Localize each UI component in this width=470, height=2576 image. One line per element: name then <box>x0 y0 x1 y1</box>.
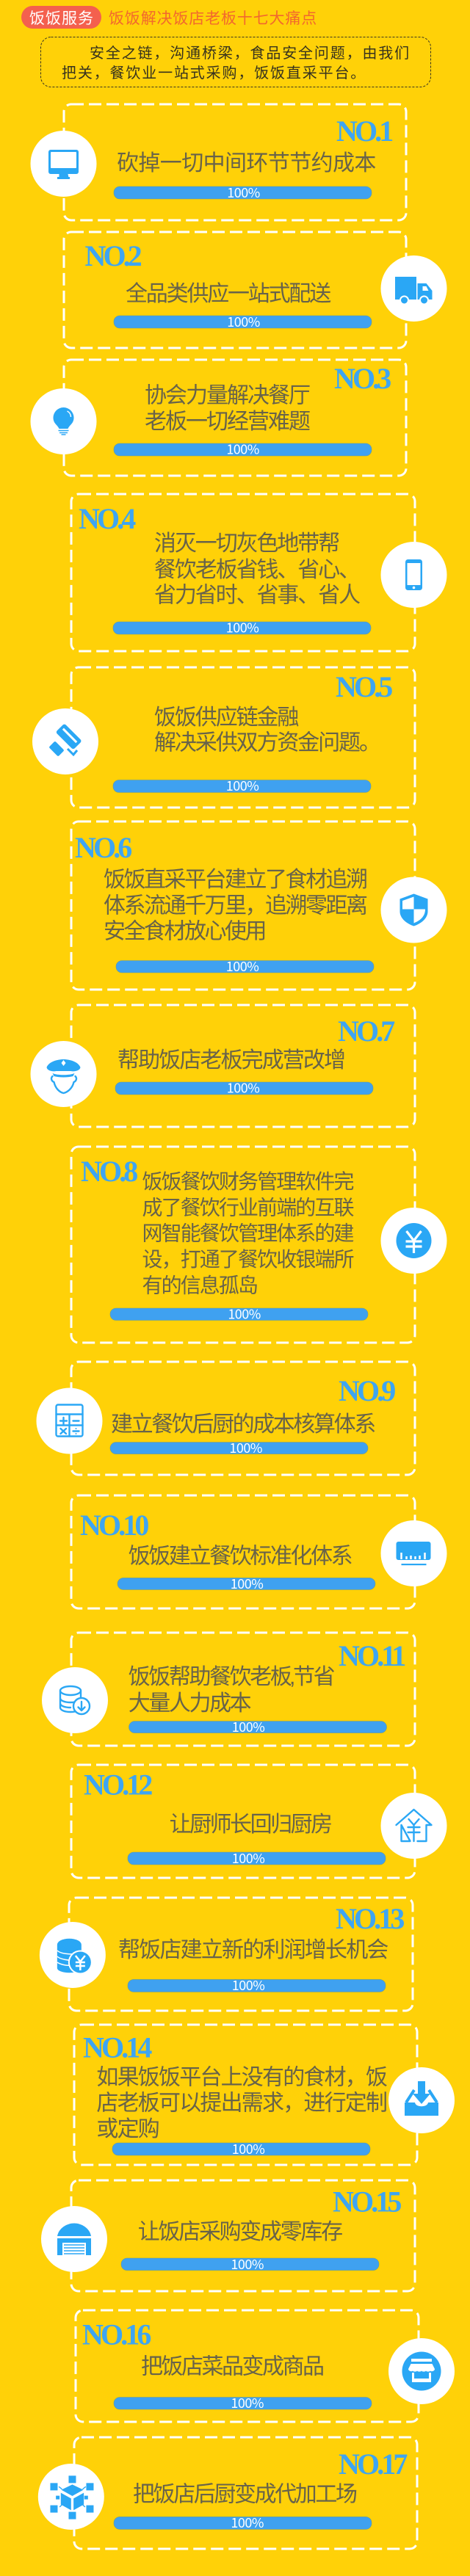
panel: NO.11 <box>42 1633 415 1746</box>
icon: officer <box>31 1041 97 1107</box>
panel: NO.3 <box>31 360 406 476</box>
description: 饭饭帮助餐饮老板 <box>129 1665 292 1689</box>
description: 老板一切经营难题 <box>145 410 310 434</box>
progress bar: 100% <box>231 2393 264 2412</box>
panel: NO.8 <box>71 1147 446 1343</box>
number: NO.16 <box>82 2318 151 2351</box>
description: 如果饭饭平台上没有的食材，饭 <box>96 2066 387 2090</box>
icon: network cube <box>38 2464 104 2530</box>
panel: NO.16 <box>76 2310 455 2422</box>
section tag pill: 饭饭服务 <box>29 10 94 27</box>
icon: garage <box>41 2206 107 2272</box>
panel: NO.10 <box>71 1495 446 1608</box>
description: 设，打通了餐饮收银端所 <box>142 1248 354 1271</box>
description: 建立餐饮后厨的成本核算体系 <box>111 1412 375 1437</box>
number: NO.12 <box>84 1768 152 1802</box>
description: 把饭店菜品变成商品 <box>141 2355 323 2379</box>
description: 成了餐饮行业前端的互联 <box>142 1197 355 1219</box>
number: NO.10 <box>80 1509 148 1542</box>
panel: NO.13 <box>40 1898 413 2011</box>
number: NO.13 <box>336 1902 404 1935</box>
progress bar <box>112 2139 370 2158</box>
panel: NO.1 <box>31 104 406 220</box>
progress bar <box>114 183 372 202</box>
description: 帮助饭店老板完成营改增 <box>118 1048 344 1073</box>
description: 砍掉一切中间环节节约成本 <box>117 151 376 175</box>
description: 安全食材放心使用 <box>104 919 265 943</box>
icon: yen coin <box>380 1208 446 1274</box>
progress bar: 100% <box>228 1304 261 1323</box>
progress bar: 100% <box>227 1078 259 1097</box>
progress bar <box>113 618 371 637</box>
intro text box: 安全之链，沟通桥梁，食品安全问题，由我们 <box>90 45 411 62</box>
panel: NO.15 <box>41 2180 415 2291</box>
icon: shop <box>388 2338 455 2404</box>
description: 饭饭建立餐饮标准化体系 <box>129 1544 352 1568</box>
description: 解决采供双方资金问题。 <box>154 731 380 755</box>
progress bar: 100% <box>232 2139 264 2158</box>
panel: NO.7 <box>31 1005 415 1127</box>
icon: light bulb <box>31 388 97 454</box>
progress bar: 100% <box>226 439 259 458</box>
icon: database download <box>42 1667 108 1733</box>
progress bar: 100% <box>231 1574 263 1593</box>
description: 饭饭直采平台建立了食材追溯 <box>104 868 366 892</box>
progress bar: 100% <box>226 957 258 976</box>
icon: paint roller <box>32 708 98 774</box>
progress bar <box>128 1848 386 1868</box>
description: 协会力量解决餐厅 <box>145 383 310 408</box>
number: NO.6 <box>75 831 131 864</box>
number: NO.15 <box>333 2185 401 2218</box>
description: 让饭店采购变成零库存 <box>138 2220 342 2244</box>
icon: air conditioner <box>380 1520 446 1586</box>
number: NO.5 <box>336 670 392 703</box>
number: NO.9 <box>339 1374 395 1407</box>
panel: NO.12 <box>71 1765 446 1878</box>
icon: shield <box>380 877 446 943</box>
progress bar: 100% <box>231 2254 264 2274</box>
icon: monitor <box>31 131 97 197</box>
progress bar <box>110 1304 368 1323</box>
progress bar <box>118 1574 375 1593</box>
description: 有的信息孤岛 <box>142 1274 257 1296</box>
number: NO.17 <box>339 2448 408 2481</box>
intro text box: 把关，餐饮业一站式采购，饭饭直采平台。 <box>62 65 366 81</box>
progress bar <box>114 2513 372 2532</box>
description: 节省 <box>293 1665 335 1689</box>
progress bar <box>128 1975 386 1995</box>
section tag pill <box>21 6 101 29</box>
icon: truck <box>380 255 446 322</box>
description: 消灭一切灰色地带帮 <box>154 531 339 556</box>
description: 店老板可以提出需求，进行定制 <box>96 2091 386 2116</box>
icon: phone <box>380 542 446 608</box>
progress bar <box>114 2393 372 2412</box>
description: , <box>289 1665 294 1689</box>
progress bar: 100% <box>232 1975 264 1995</box>
progress bar: 100% <box>229 1438 262 1457</box>
number: NO.14 <box>83 2031 152 2064</box>
number: NO.4 <box>79 502 136 535</box>
panel: NO.14 <box>74 2025 455 2165</box>
description: 大量人力成本 <box>129 1691 251 1716</box>
progress bar: 100% <box>226 776 258 795</box>
number: NO.8 <box>81 1155 137 1188</box>
progress bar: 100% <box>232 1848 264 1868</box>
description: 饭饭餐饮财务管理软件完 <box>142 1170 354 1193</box>
number: NO.1 <box>336 115 392 148</box>
icon: calculator <box>37 1387 103 1454</box>
panel: NO.5 <box>32 667 415 808</box>
progress bar <box>115 1078 373 1097</box>
number: NO.11 <box>339 1639 405 1672</box>
description: 饭饭供应链金融 <box>154 705 298 730</box>
description: 或定购 <box>96 2117 159 2141</box>
progress bar <box>116 957 374 976</box>
icon: coins <box>40 1922 106 1988</box>
description: 把饭店后厨变成代加工场 <box>133 2483 357 2507</box>
panel: NO.4 <box>71 494 446 651</box>
description: 网智能餐饮管理体系的建 <box>142 1222 354 1245</box>
panel: NO.17 <box>38 2437 417 2549</box>
progress bar <box>114 312 372 331</box>
panel: NO.9 <box>37 1362 415 1475</box>
number: NO.7 <box>338 1015 395 1048</box>
progress bar <box>113 776 371 795</box>
progress bar <box>129 1717 386 1736</box>
description: 帮饭店建立新的利润增长机会 <box>118 1938 388 1962</box>
progress bar <box>121 2254 379 2274</box>
description: 省力省时、省事、省人 <box>154 583 360 608</box>
progress bar: 100% <box>226 618 258 637</box>
description: 全品类供应一站式配送 <box>126 282 331 306</box>
description: 体系流通千万里，追溯零距离 <box>104 894 367 918</box>
progress bar: 100% <box>231 2513 264 2532</box>
progress bar <box>114 439 372 458</box>
progress bar <box>110 1438 368 1457</box>
progress bar: 100% <box>227 183 260 202</box>
title: 饭饭解决饭店老板十七大痛点 <box>109 10 317 27</box>
panel: NO.6 <box>71 821 446 990</box>
progress bar: 100% <box>232 1717 264 1736</box>
description: 让厨师长回归厨房 <box>170 1813 331 1837</box>
icon: inbox download <box>388 2067 455 2133</box>
progress bar: 100% <box>227 312 260 331</box>
number: NO.3 <box>334 362 391 395</box>
description: 餐饮老板省钱、省心、 <box>154 558 359 582</box>
intro text box <box>41 37 430 87</box>
number: NO.2 <box>85 239 142 272</box>
panel: NO.2 <box>64 232 446 348</box>
icon: house with yen <box>380 1793 446 1859</box>
